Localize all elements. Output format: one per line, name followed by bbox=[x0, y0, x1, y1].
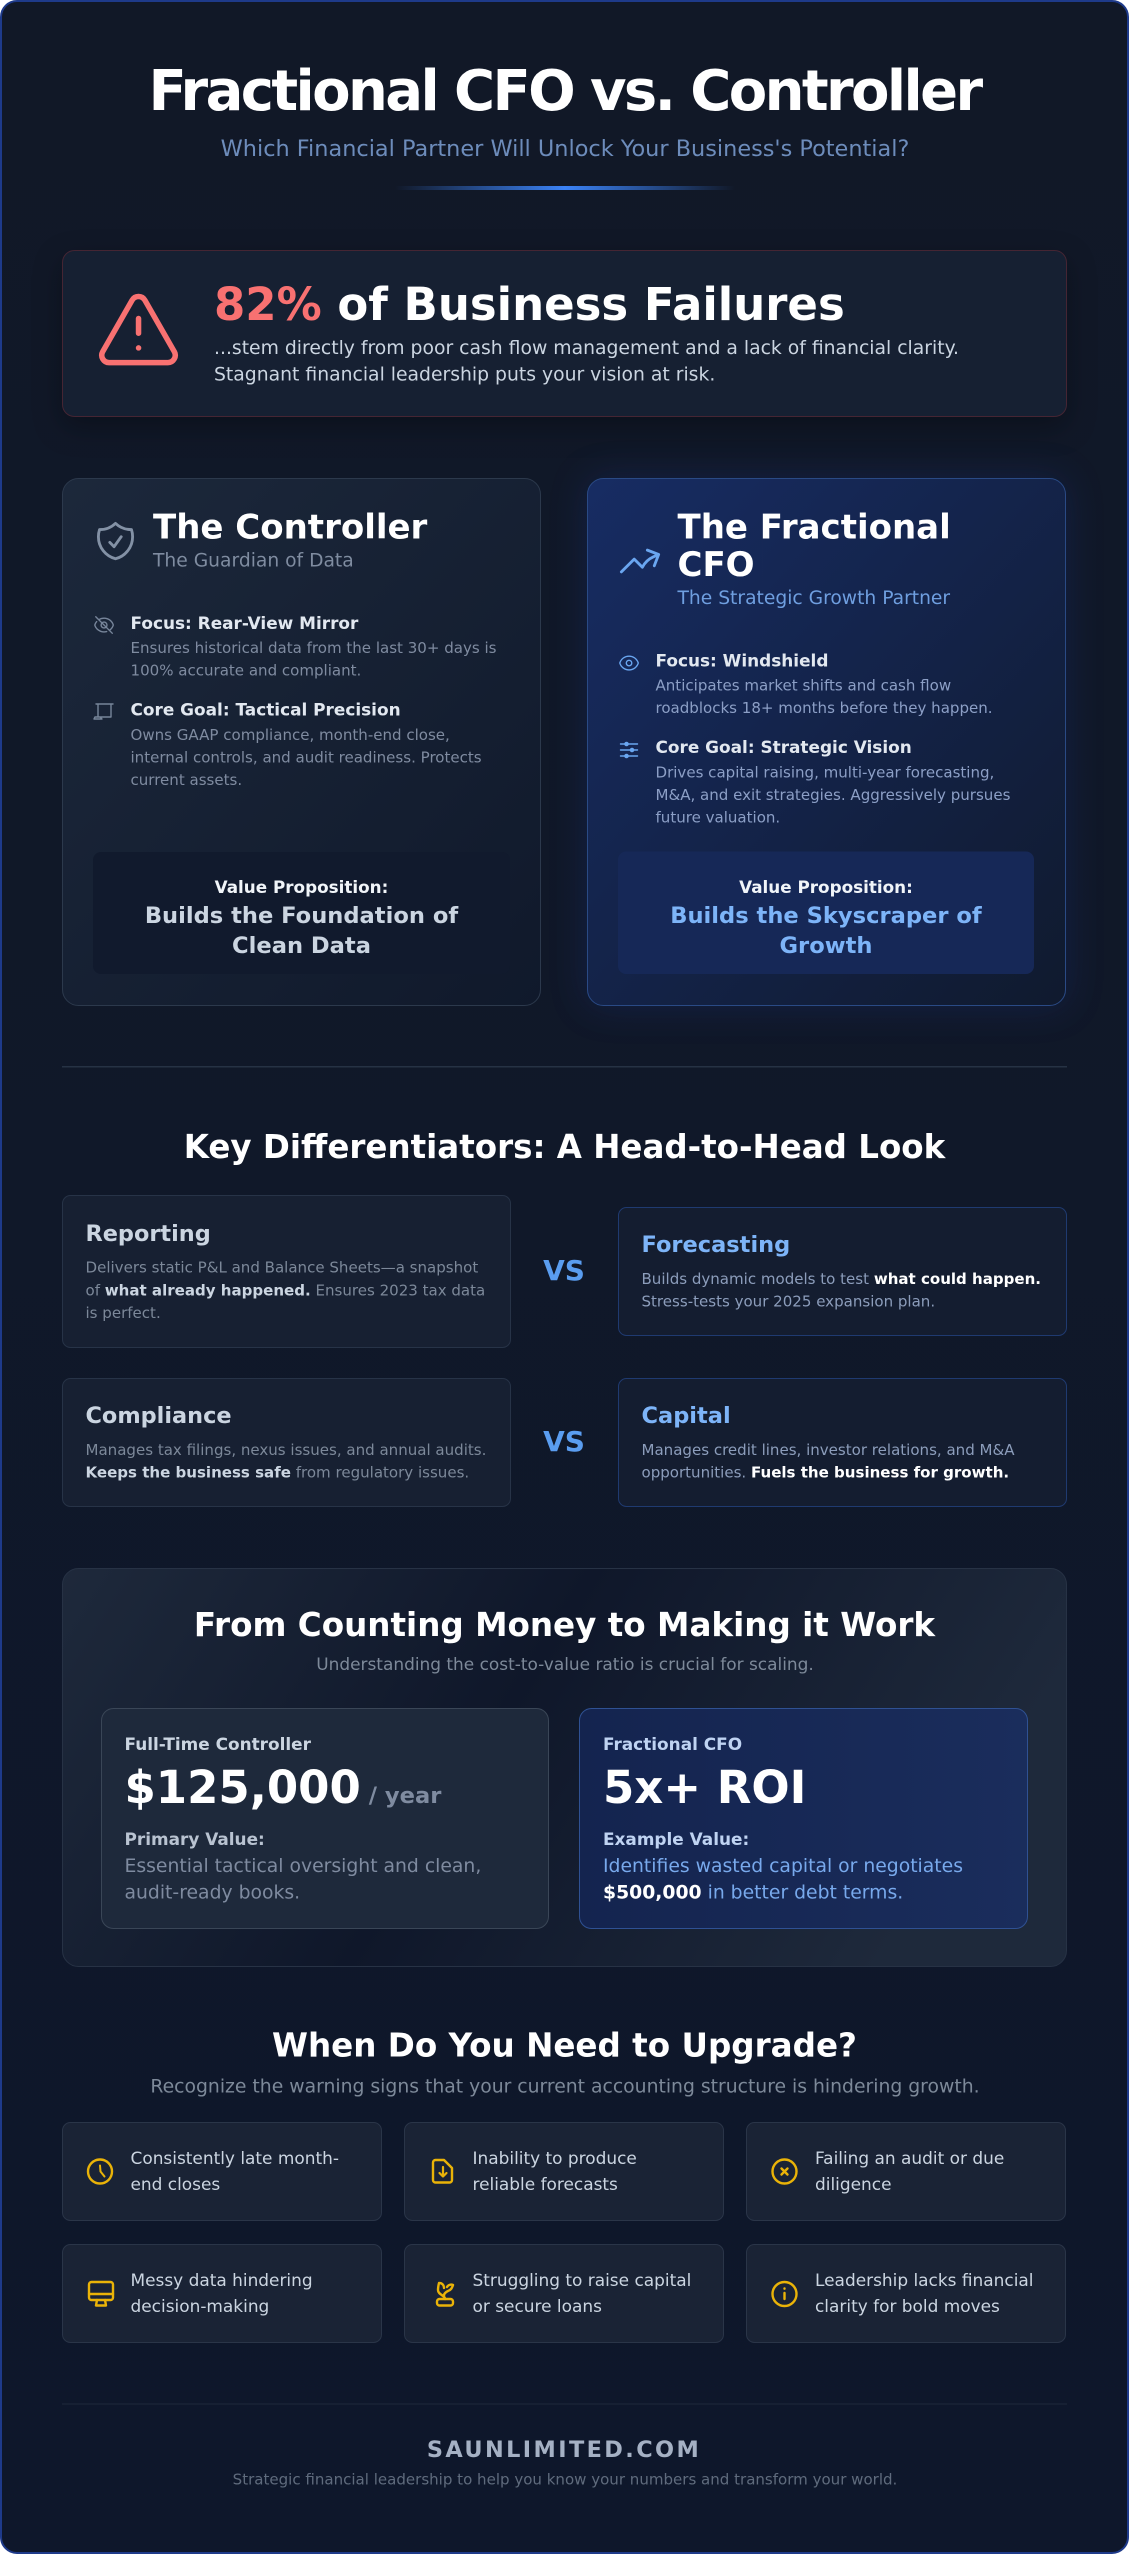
icon: warning triangle bbox=[102, 296, 175, 363]
icon: eye bbox=[620, 656, 638, 670]
card: fractional CFO: $500,000 in better debt terms. bbox=[603, 1882, 903, 1903]
focus item: Focus: Windshield bbox=[656, 650, 828, 670]
focus item: Ensures historical data from the last 30+ days is bbox=[130, 639, 497, 657]
core goal item: Owns GAAP compliance, month-end close, bbox=[130, 726, 450, 744]
value proposition box: Builds the Skyscraper of bbox=[670, 903, 983, 929]
panel: Reporting: is perfect. bbox=[86, 1304, 161, 1322]
focus item: roadblocks 18+ months before they happen. bbox=[656, 699, 993, 717]
card: fractional CFO bbox=[580, 1708, 1028, 1928]
value proposition box: Value Proposition: bbox=[215, 877, 388, 897]
section subheading: Understanding the cost-to-value ratio is crucial for scaling. bbox=[316, 1654, 814, 1674]
core goal item: M&A, and exit strategies. Aggressively pursues bbox=[656, 786, 1011, 804]
title: Fractional CFO vs. Controller bbox=[148, 59, 983, 124]
controller heading: The Controller bbox=[153, 508, 428, 548]
card: fractional CFO: 5x+ ROI bbox=[603, 1761, 806, 1814]
panel: Compliance: Manages tax filings, nexus issues, and annual audits. bbox=[86, 1441, 486, 1459]
subheading: when to upgrade: Recognize the warning signs that your current accounting structure is hindering growth. bbox=[150, 2076, 980, 2098]
card: fractional CFO: Example Value: bbox=[603, 1829, 749, 1849]
heading: when to upgrade: When Do You Need to Upgrade? bbox=[272, 2027, 857, 2065]
icon: info bbox=[772, 2282, 796, 2306]
icon: presentation bbox=[94, 704, 113, 719]
card: late closes: Consistently late month- bbox=[130, 2148, 339, 2168]
alert body text: Stagnant financial leadership puts your vision at risk. bbox=[214, 364, 715, 385]
card: full-time controller: Primary Value: bbox=[124, 1829, 265, 1849]
card: full-time controller bbox=[102, 1708, 548, 1928]
card: raising capital: or secure loans bbox=[472, 2296, 602, 2316]
section heading: From Counting Money to Making it Work bbox=[194, 1606, 936, 1644]
panel: Capital: Capital bbox=[642, 1403, 731, 1429]
core goal item: Core Goal: Tactical Precision bbox=[130, 700, 401, 720]
controller subheading: The Guardian of Data bbox=[152, 550, 354, 571]
header bbox=[148, 59, 983, 190]
panel: Forecasting bbox=[618, 1208, 1066, 1336]
heading: key differentiators: Key Differentiators: A Head-to-Head Look bbox=[184, 1128, 947, 1166]
value proposition box bbox=[93, 852, 510, 974]
card: raising capital bbox=[404, 2244, 724, 2342]
card: late closes bbox=[62, 2122, 382, 2220]
core goal item: current assets. bbox=[130, 771, 242, 789]
card: fractional CFO: Fractional CFO bbox=[603, 1734, 742, 1754]
panel: Capital: Manages credit lines, investor relations, and M&A bbox=[642, 1441, 1015, 1459]
card: raising capital: Struggling to raise capital bbox=[472, 2270, 691, 2290]
card: full-time controller: audit-ready books. bbox=[124, 1882, 300, 1903]
core goal item: internal controls, and audit readiness. Protects bbox=[130, 748, 482, 766]
panel: Forecasting: Forecasting bbox=[642, 1232, 790, 1258]
panel: Compliance: Compliance bbox=[86, 1403, 232, 1429]
card: messy data: decision-making bbox=[130, 2296, 269, 2316]
VS marker: VS bbox=[543, 1254, 585, 1287]
card: messy data: Messy data hindering bbox=[130, 2270, 313, 2290]
card: fractional CFO: Identifies wasted capital or negotiates bbox=[603, 1856, 963, 1877]
header accent rule bbox=[395, 186, 735, 190]
icon: eye off bbox=[95, 617, 113, 633]
card: leadership clarity: clarity for bold moves bbox=[815, 2296, 1000, 2316]
card: full-time controller: Full-Time Controller bbox=[124, 1734, 312, 1754]
card: forecasts: Inability to produce bbox=[472, 2148, 637, 2168]
card: leadership clarity bbox=[746, 2244, 1066, 2342]
CFO subheading: The Strategic Growth Partner bbox=[676, 588, 950, 609]
panel: Reporting: of what already happened. Ensures 2023 tax data bbox=[86, 1281, 485, 1299]
VS marker: VS bbox=[543, 1425, 585, 1458]
card: leadership clarity: Leadership lacks financial bbox=[815, 2270, 1034, 2290]
brand: SAUNLIMITED.COM bbox=[427, 2437, 701, 2463]
icon: x circle bbox=[772, 2160, 796, 2184]
card: failed audit: diligence bbox=[815, 2174, 892, 2194]
card: full-time controller: $125,000 / year bbox=[124, 1761, 442, 1814]
footer bbox=[233, 2437, 897, 2488]
focus item: Focus: Rear-View Mirror bbox=[130, 613, 359, 633]
panel: The Fractional CFO bbox=[588, 478, 1066, 1006]
card: failed audit bbox=[746, 2122, 1066, 2220]
icon: clock bbox=[88, 2160, 112, 2184]
panel: Forecasting: Stress-tests your 2025 expansion plan. bbox=[642, 1293, 935, 1311]
CFO heading: CFO bbox=[678, 545, 755, 585]
card: forecasts bbox=[404, 2122, 724, 2220]
tagline: Strategic financial leadership to help you know your numbers and transform your world. bbox=[233, 2470, 897, 2488]
icon: file download bbox=[433, 2160, 452, 2182]
icon: monitor bbox=[89, 2282, 113, 2306]
focus item: 100% accurate and compliant. bbox=[130, 661, 361, 679]
alert body text: ...stem directly from poor cash flow management and a lack of financial clarity. bbox=[214, 338, 959, 359]
CFO heading: The Fractional bbox=[678, 508, 951, 548]
icon: sprout bbox=[437, 2283, 453, 2306]
panel: Reporting: Delivers static P&L and Balance Sheets—a snapshot bbox=[86, 1259, 478, 1277]
panel: Reporting bbox=[62, 1196, 510, 1348]
focus item: Anticipates market shifts and cash flow bbox=[656, 676, 951, 694]
icon: shield check bbox=[98, 523, 133, 559]
card: messy data bbox=[62, 2244, 382, 2342]
card: full-time controller: Essential tactical oversight and clean, bbox=[124, 1856, 481, 1877]
panel: Capital: opportunities. Fuels the business for growth. bbox=[642, 1464, 1009, 1482]
panel: Compliance bbox=[62, 1378, 510, 1506]
value proposition box: Builds the Foundation of bbox=[145, 903, 459, 929]
icon: sliders bbox=[620, 742, 638, 758]
card: late closes: end closes bbox=[130, 2174, 220, 2194]
panel: Forecasting: Builds dynamic models to test what could happen. bbox=[642, 1270, 1041, 1288]
panel: Capital bbox=[618, 1378, 1066, 1506]
panel: alert statistic bbox=[62, 250, 1066, 416]
panel: Compliance: Keeps the business safe from regulatory issues. bbox=[86, 1464, 469, 1482]
panel: The Controller bbox=[62, 478, 540, 1006]
card: forecasts: reliable forecasts bbox=[472, 2174, 618, 2194]
value proposition box: Value Proposition: bbox=[739, 877, 913, 897]
core goal item: future valuation. bbox=[656, 808, 780, 826]
value proposition box: Clean Data bbox=[232, 933, 371, 959]
alert headline: 82% of Business Failures bbox=[214, 278, 845, 331]
core goal item: Core Goal: Strategic Vision bbox=[656, 737, 912, 757]
icon: trending up bbox=[621, 550, 659, 572]
value proposition box bbox=[618, 852, 1034, 974]
value proposition box: Growth bbox=[780, 933, 872, 959]
core goal item: Drives capital raising, multi-year forecasting, bbox=[656, 764, 994, 782]
subtitle: Which Financial Partner Will Unlock Your Business's Potential? bbox=[221, 136, 909, 162]
panel: cost vs value bbox=[62, 1568, 1066, 1966]
card: failed audit: Failing an audit or due bbox=[815, 2148, 1004, 2168]
panel: Reporting: Reporting bbox=[86, 1221, 211, 1247]
